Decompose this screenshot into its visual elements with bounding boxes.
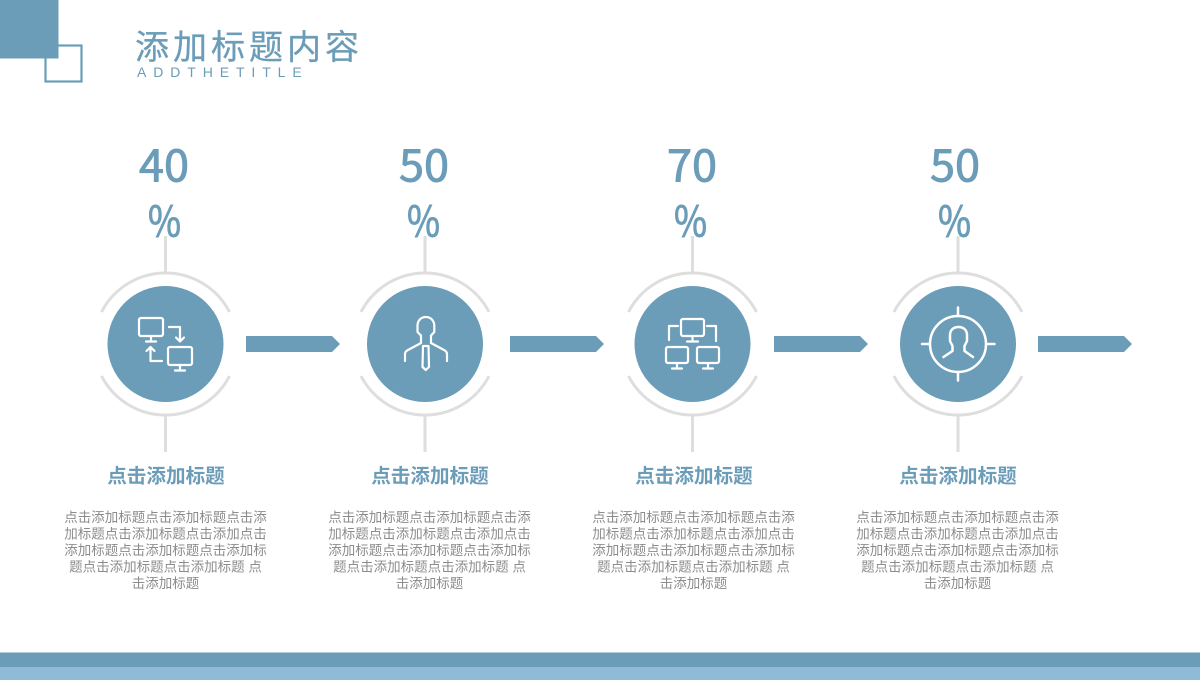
step 3 description: 击添加标题 bbox=[660, 576, 727, 591]
connector lines and ring arcs bbox=[102, 236, 230, 452]
connector lines and ring arcs bbox=[894, 236, 1022, 452]
step 2 description: 击添加标题 bbox=[396, 576, 463, 591]
percentage: 50%: 50 bbox=[399, 132, 449, 194]
step 1 description: 点击添加标题点击添加标题点击添 bbox=[64, 510, 267, 525]
step 3 description: 添加标题点击添加标题点击添加标 bbox=[592, 543, 795, 558]
percentage: 50% bbox=[399, 132, 449, 250]
circle badge bbox=[634, 286, 750, 402]
step 2 description: 添加标题点击添加标题点击添加标 bbox=[328, 543, 531, 558]
step 2 description: 加标题点击添加标题点击添加点击 bbox=[328, 526, 531, 542]
percentage: 50%: 50 bbox=[930, 132, 980, 194]
step 2 bbox=[361, 132, 489, 452]
step 1 description: 击添加标题 bbox=[132, 576, 199, 591]
percentage: 70%: % bbox=[674, 188, 707, 250]
arrow 2 bbox=[510, 336, 604, 352]
step 4 bbox=[894, 132, 1022, 452]
step 3 description: 加标题点击添加标题点击添加点击 bbox=[592, 526, 795, 542]
percentage: 50%: % bbox=[938, 188, 971, 250]
circle badge bbox=[108, 286, 224, 402]
step 1 bbox=[102, 132, 230, 452]
step 4 description: 点击添加标题点击添加标题点击添 bbox=[856, 510, 1059, 525]
step 2 heading: 点击添加标题 bbox=[371, 460, 489, 488]
connector lines and ring arcs bbox=[361, 236, 489, 452]
step 2 description: 题点击添加标题点击添加标题 点 bbox=[333, 560, 526, 574]
step 3 description: 点击添加标题点击添加标题点击添 bbox=[592, 510, 795, 525]
logo: overlapping squares bbox=[0, 0, 82, 82]
step 1 description: 添加标题点击添加标题点击添加标 bbox=[64, 543, 267, 558]
arrow 3 bbox=[774, 336, 868, 352]
step 4 description bbox=[856, 510, 1059, 591]
percentage: 40%: % bbox=[148, 188, 181, 250]
step 2 description: 点击添加标题点击添加标题点击添 bbox=[328, 510, 531, 525]
percentage: 70% bbox=[667, 132, 717, 250]
step 1 heading: 点击添加标题 bbox=[107, 460, 225, 488]
arrow 4 bbox=[1038, 336, 1132, 352]
step 4 description: 题点击添加标题点击添加标题 点 bbox=[861, 560, 1054, 574]
percentage: 50%: % bbox=[407, 188, 440, 250]
step 3 description bbox=[592, 510, 795, 591]
step 3 bbox=[628, 132, 756, 452]
percentage: 40% bbox=[139, 132, 189, 250]
connector lines and ring arcs bbox=[628, 236, 756, 452]
step 3 heading: 点击添加标题 bbox=[635, 460, 753, 488]
percentage: 50% bbox=[930, 132, 980, 250]
icon: two exchanging monitors bbox=[139, 318, 192, 370]
icon: businessman with tie bbox=[405, 317, 447, 370]
step 3 description: 题点击添加标题点击添加标题 点 bbox=[597, 560, 790, 574]
step 2 description bbox=[328, 510, 531, 591]
circle badge bbox=[367, 286, 483, 402]
percentage: 70%: 70 bbox=[667, 132, 717, 194]
icon: networked monitors bbox=[666, 319, 719, 368]
step 1 description bbox=[64, 510, 267, 591]
footer bands bbox=[0, 652, 1200, 680]
circle badge bbox=[900, 286, 1016, 402]
arrow 1 bbox=[246, 336, 340, 352]
title: 添加标题内容 bbox=[135, 20, 363, 69]
subtitle: ADDTHETITLE bbox=[137, 64, 309, 80]
step 4 description: 添加标题点击添加标题点击添加标 bbox=[856, 543, 1059, 558]
step 4 description: 击添加标题 bbox=[924, 576, 991, 591]
step 1 description: 题点击添加标题点击添加标题 点 bbox=[69, 560, 262, 574]
icon: person in target bbox=[922, 308, 994, 380]
step 4 description: 加标题点击添加标题点击添加点击 bbox=[856, 526, 1059, 542]
percentage: 40%: 40 bbox=[139, 132, 189, 194]
step 4 heading: 点击添加标题 bbox=[899, 460, 1017, 488]
step 1 description: 加标题点击添加标题点击添加点击 bbox=[64, 526, 267, 542]
